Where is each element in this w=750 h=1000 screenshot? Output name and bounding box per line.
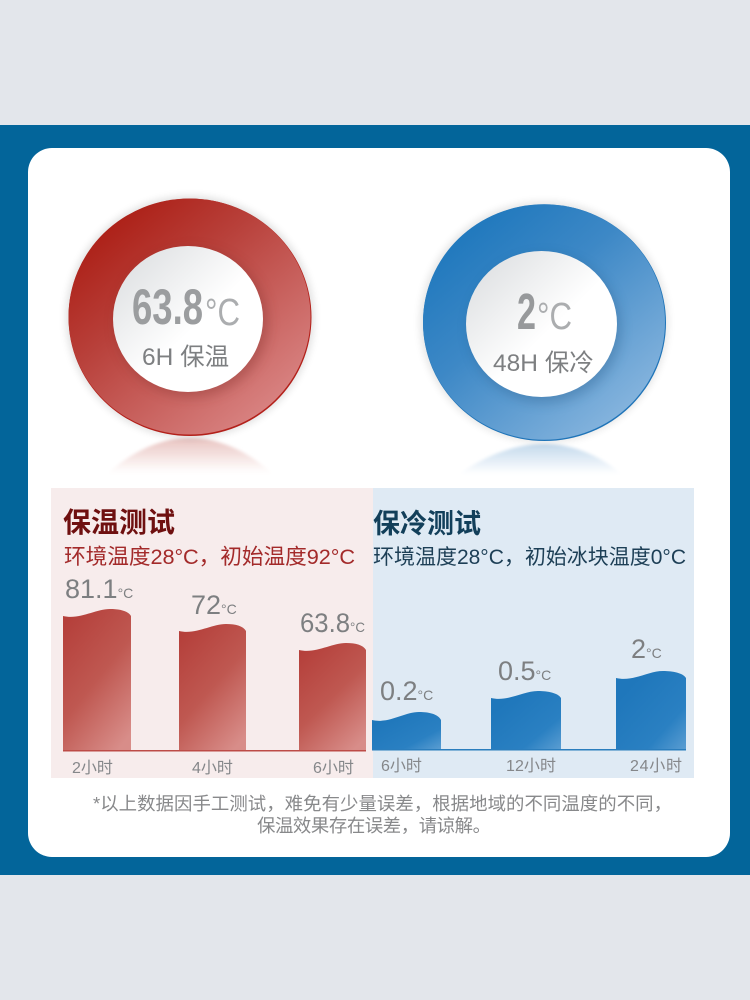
blue dial inner shadow: [469, 255, 621, 403]
warm label 3: 6小时: [313, 759, 354, 777]
panel: keep-cold test: [372, 488, 694, 778]
cold bar 3: [616, 671, 686, 749]
warm panel heading: 保温测试: [63, 507, 175, 538]
cold label 1: 6小时: [381, 757, 422, 775]
cold panel background: [373, 488, 694, 778]
footnote: *以上数据因手工测试，难免有少量误差，根据地域的不同温度的不同，: [93, 793, 672, 814]
warm value 3: 63.8°C: [300, 608, 365, 638]
cold panel conditions: 环境温度28°C，初始冰块温度0°C: [373, 546, 686, 569]
warm baseline: [63, 750, 366, 752]
cold value 2: 0.5°C: [498, 656, 551, 686]
warm bar 1: [63, 609, 131, 751]
warm panel background: [51, 488, 373, 778]
blue dial value: 2: [517, 283, 536, 340]
warm label 1: 2小时: [72, 759, 113, 777]
cold label 3: 24小时: [630, 757, 682, 775]
cold baseline: [372, 749, 686, 750]
warm value 2: 72°C: [191, 590, 237, 620]
red dial outer shadow: [66, 196, 314, 438]
footnote: 保温效果存在误差，请谅解。: [257, 815, 491, 836]
footnote: [93, 793, 672, 836]
red dial inner shadow: [116, 249, 268, 397]
blue dial: 48H keep cold: [420, 202, 668, 477]
red dial caption: 6H 保温: [142, 343, 229, 371]
warm bar chart: [63, 574, 366, 777]
red dial centre disc: [113, 246, 263, 392]
cold label 2: 12小时: [506, 757, 556, 775]
blue dial caption: 48H 保冷: [493, 349, 594, 377]
cold value 3: 2°C: [631, 634, 662, 664]
blue dial centre disc: [466, 251, 617, 397]
blue dial outer shadow: [420, 202, 668, 442]
warm bar 2: [179, 624, 246, 751]
cold value 1: 0.2°C: [380, 676, 433, 706]
red dial unit: °C: [205, 292, 240, 334]
red dial reflection: [104, 438, 276, 477]
white card: [28, 148, 730, 857]
blue dial rim: [423, 204, 666, 441]
red dial rim: [68, 199, 312, 436]
warm bar 3: [299, 643, 366, 751]
panel: keep-warm test: [51, 488, 373, 778]
blue dial reflection: [455, 444, 625, 477]
red dial ring: [68, 198, 310, 434]
blue dial unit: °C: [537, 296, 572, 338]
cold bar 2: [491, 691, 561, 749]
cold bar chart: [372, 634, 686, 775]
cold panel heading: 保冷测试: [373, 509, 481, 539]
cold bar 1: [372, 712, 441, 749]
red dial value: 63.8: [132, 279, 203, 335]
warm panel conditions: 环境温度28°C，初始温度92°C: [64, 544, 355, 569]
blue dial ring: [423, 204, 665, 440]
blue background band: [0, 125, 750, 875]
warm label 2: 4小时: [192, 759, 233, 777]
warm value 1: 81.1°C: [65, 574, 133, 604]
red dial: 6H keep warm: [66, 196, 314, 477]
